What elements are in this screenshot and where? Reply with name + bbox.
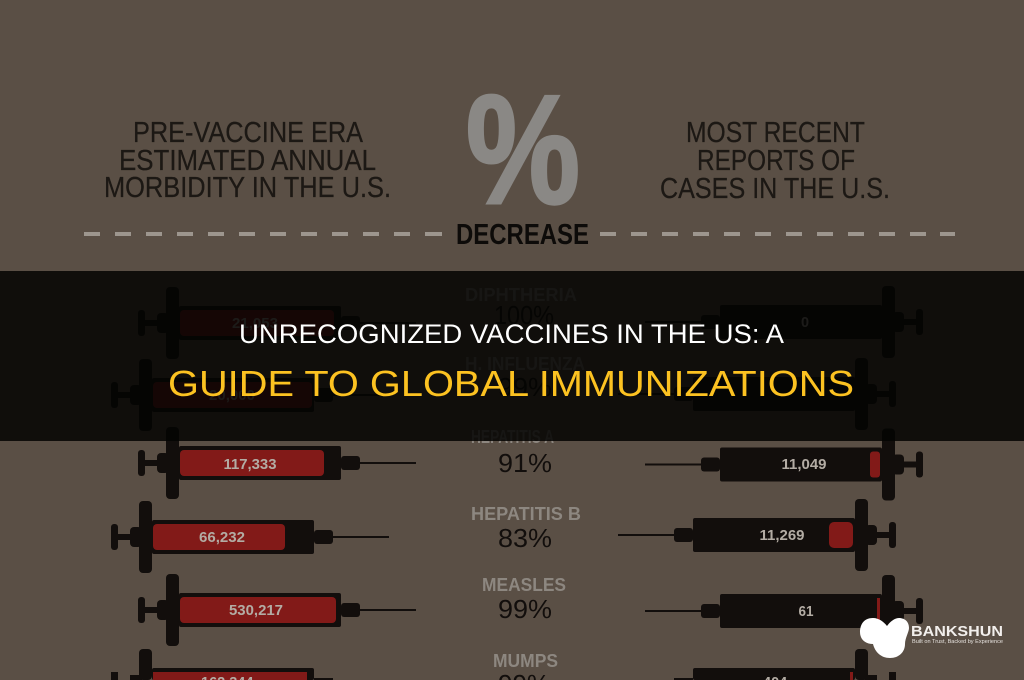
label: h. influenza: 99%: [498, 372, 552, 402]
label: measles: 99%: [498, 594, 552, 624]
header: right column heading: REPORTS OF: [697, 145, 855, 177]
syringe: hepatitis a recent: [645, 428, 923, 500]
syringe: h. influenza pre-vaccine: [111, 359, 389, 431]
label: hepatitis b: HEPATITIS B: [471, 504, 581, 524]
logo: bankshun: [860, 618, 1003, 658]
label: hepatitis b: 83%: [498, 523, 552, 553]
syringe: hepatitis a pre-vaccine: [138, 427, 416, 499]
icon: logo blob: [860, 618, 909, 658]
label: hepatitis a: HEPATITIS A: [471, 427, 554, 447]
syringe: measles pre-vaccine: [138, 574, 416, 646]
value: diphtheria recent: 0: [801, 315, 809, 331]
decrease heading: DECREASE: [456, 219, 589, 251]
label: h. influenza: H. INFLUENZA: [465, 354, 585, 374]
logo wordmark: BANKSHUN: [911, 623, 1003, 640]
logo tagline: Built on Trust, Backed by Experience: [912, 639, 1003, 645]
label: diphtheria: DIPHTHERIA: [465, 285, 577, 305]
syringe: h. influenza recent: [618, 358, 896, 430]
syringe: mumps recent (cropped by frame): [674, 649, 896, 680]
label: diphtheria: 100%: [494, 300, 554, 330]
header: left column heading: PRE-VACCINE ERA: [133, 117, 364, 149]
syringe: hepatitis b pre-vaccine: [111, 501, 389, 573]
header: right column heading: CASES IN THE U.S.: [660, 173, 890, 205]
value: measles recent: 61: [798, 604, 814, 620]
header: right column heading: MOST RECENT: [686, 117, 865, 149]
syringe: hepatitis b recent: [618, 499, 896, 571]
label: hepatitis a: 91%: [498, 448, 552, 478]
title line 2: GUIDE TO GLOBAL IMMUNIZATIONS: [168, 363, 854, 404]
header: left column heading: [104, 117, 391, 204]
label: hepatitis a: [471, 427, 554, 478]
header: left column heading: ESTIMATED ANNUAL: [119, 145, 376, 177]
label: hepatitis b: [471, 504, 581, 553]
header: right column heading: [660, 117, 890, 205]
syringe: measles recent: [645, 575, 923, 647]
value: diphtheria pre-vaccine: 21,053: [232, 316, 278, 332]
label: mumps: MUMPS: [493, 651, 558, 671]
value: hepatitis a recent: 11,049: [782, 457, 826, 473]
label: measles: [482, 575, 566, 624]
header: left column heading: MORBIDITY IN THE U.S.: [104, 172, 391, 204]
label: h. influenza: [465, 354, 585, 402]
syringe: mumps pre-vaccine (cropped by frame): [111, 649, 333, 680]
value: hepatitis a pre-vaccine: 117,333: [224, 457, 276, 473]
syringe: diphtheria pre-vaccine: [138, 287, 416, 359]
title line 1: UNRECOGNIZED VACCINES IN THE US: A: [239, 319, 784, 349]
value: hepatitis b recent: 11,269: [760, 528, 804, 544]
syringe: diphtheria recent: [645, 286, 923, 358]
percent symbol: %: [466, 63, 580, 236]
label: measles: MEASLES: [482, 575, 566, 595]
value: measles pre-vaccine: 530,217: [229, 603, 283, 619]
title band: [0, 271, 1024, 441]
label: diphtheria: [465, 285, 577, 330]
value: h. influenza pre-vaccine: 20,000: [209, 388, 255, 404]
value: hepatitis b pre-vaccine: 66,232: [199, 530, 245, 546]
